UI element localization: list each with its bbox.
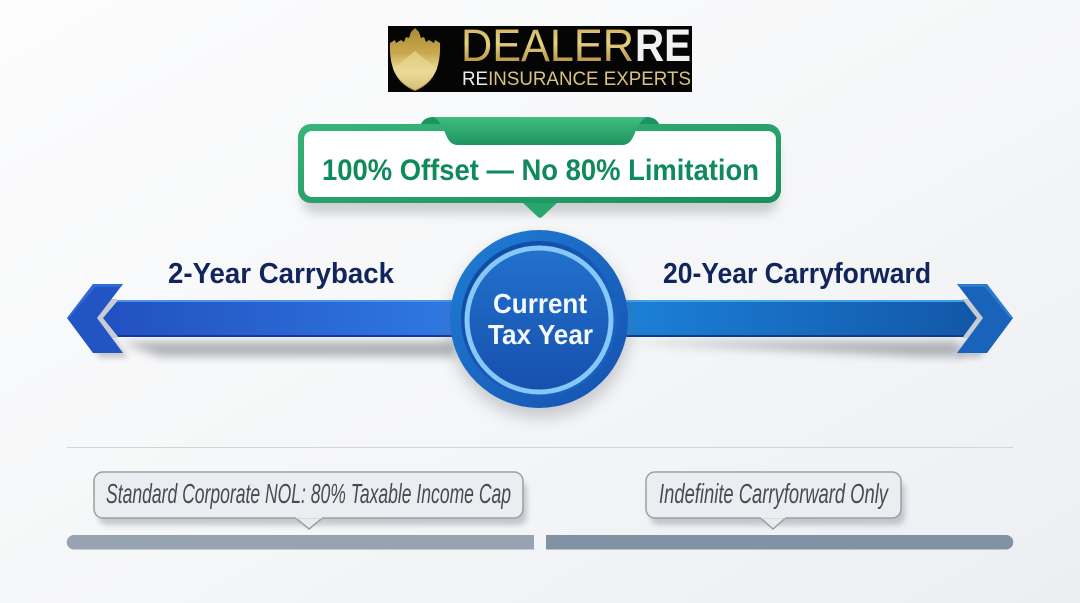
logo tagline: REINSURANCE EXPERTS — [462, 68, 691, 90]
bar: standard NOL period — [67, 535, 534, 550]
arrow head — [67, 284, 123, 353]
ribbon front — [433, 117, 647, 145]
circle text: Current — [493, 288, 587, 319]
ribbon back — [420, 117, 660, 126]
bar: indefinite carryforward period — [546, 535, 1013, 550]
callout pointer — [522, 202, 558, 218]
icon: gold shield — [390, 28, 440, 91]
callout: 100% offset — [298, 117, 781, 218]
arrow shaft — [625, 300, 977, 337]
arrow shaft — [103, 300, 455, 337]
callout text: 100% Offset — No 80% Limitation — [322, 154, 759, 187]
tooltip: indefinite carryforward — [646, 472, 905, 529]
arrow gap highlight — [97, 299, 118, 338]
arrow gap highlight — [962, 299, 983, 338]
label: 2-Year Carryback: 2-Year Carryback — [168, 258, 395, 290]
logo wordmark: RE: RE — [635, 20, 691, 71]
center circle: current tax year: Tax Year — [488, 319, 593, 350]
tooltip text: Standard Corporate NOL: 80% Taxable Income Cap — [106, 478, 511, 509]
left arrow: 2-year carryback — [67, 284, 455, 358]
arrow head — [957, 284, 1013, 353]
right arrow: 20-year carryforward — [625, 284, 1013, 358]
logo: DealerRE Reinsurance Experts — [388, 20, 692, 92]
logo wordmark: DEALER: DEALER — [461, 20, 634, 71]
label: 20-Year Carryforward: 20-Year Carryforward — [663, 258, 931, 290]
circle highlight ring — [467, 248, 611, 392]
center circle: current tax year — [450, 230, 630, 418]
tooltip: standard corporate NOL — [94, 472, 527, 529]
tooltip text: Indefinite Carryforward Only — [659, 478, 889, 509]
